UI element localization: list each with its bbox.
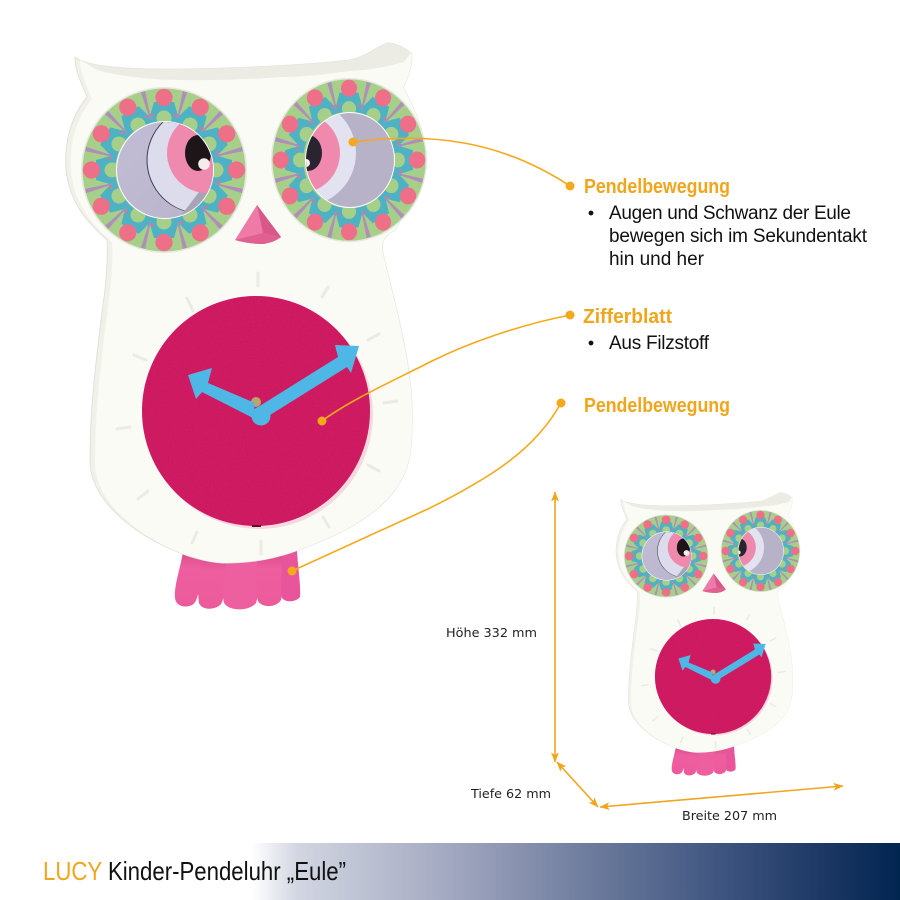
- label: depth: Tiefe 62 mm: [470, 786, 551, 801]
- footer gradient band: [0, 843, 900, 900]
- arrow: depth: [557, 762, 598, 807]
- small owl clock: [616, 492, 801, 776]
- text block: Pendelbewegung eyes: [584, 176, 868, 270]
- callout line: pendulum tail: [288, 398, 566, 576]
- text block: Pendelbewegung eyes: bewegen sich im Sekundentakt: [609, 226, 868, 247]
- text block: Zifferblatt: Aus Filzstoff: [609, 333, 710, 354]
- text block: Zifferblatt: [583, 306, 710, 354]
- heading: Pendelbewegung tail: Pendelbewegung: [584, 395, 730, 417]
- large owl pendulum clock: [66, 43, 429, 609]
- callout line: dial: [318, 310, 574, 426]
- text block: Pendelbewegung eyes: Pendelbewegung: [584, 176, 730, 198]
- label: height: Höhe 332 mm: [446, 625, 537, 640]
- arrow: width: [600, 786, 843, 807]
- text block: Zifferblatt: Zifferblatt: [583, 306, 672, 328]
- footer title: LUCY Kinder-Pendeluhr „Eule”: [43, 856, 346, 886]
- label: width: Breite 207 mm: [682, 808, 777, 823]
- text block: Pendelbewegung eyes: Augen und Schwanz der Eule: [609, 203, 851, 224]
- text block: Pendelbewegung eyes: hin und her: [609, 249, 705, 270]
- callout line: eyes: [348, 138, 574, 190]
- arrow: height: [554, 492, 556, 762]
